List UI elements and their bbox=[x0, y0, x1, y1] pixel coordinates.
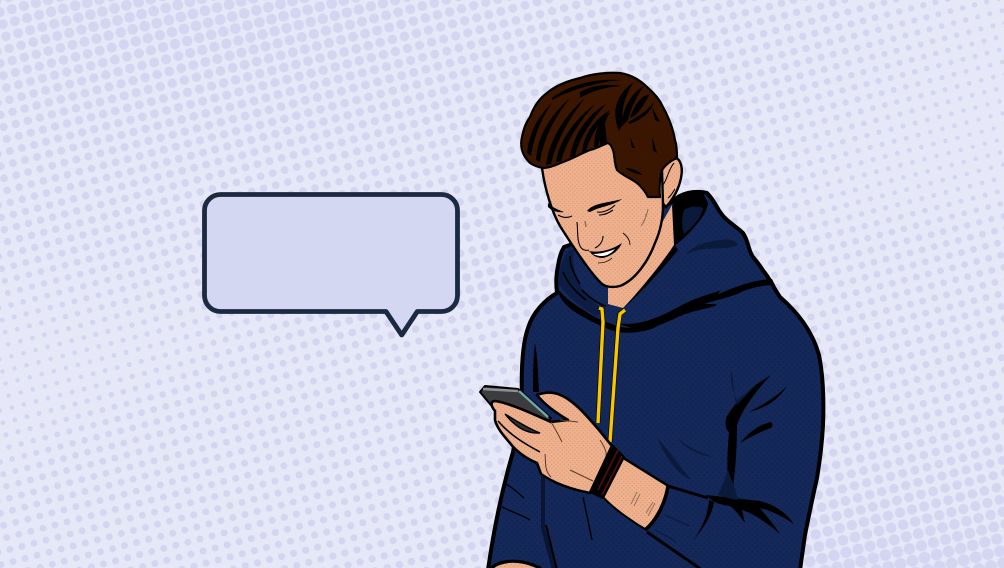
hair strands left bbox=[527, 98, 595, 165]
nose shade bbox=[585, 221, 586, 227]
arm wrinkle main bbox=[726, 375, 771, 503]
wristband detail bbox=[598, 450, 622, 495]
right drawstring bbox=[610, 310, 625, 442]
hair strands centre bbox=[570, 104, 610, 157]
right eye bbox=[597, 205, 615, 215]
sleeve shadow bbox=[718, 470, 738, 500]
arm wrinkle shadow bbox=[731, 370, 771, 405]
drawstring fill bbox=[610, 310, 625, 442]
chest wrinkles bbox=[657, 437, 691, 480]
drawstring outline bbox=[610, 310, 625, 442]
elbow crease bbox=[706, 495, 794, 534]
person looking at phone bbox=[480, 73, 823, 568]
head bbox=[521, 73, 682, 287]
mouth bbox=[588, 243, 622, 258]
hair top lines bbox=[552, 80, 622, 100]
collar shadow spikes bbox=[618, 290, 742, 328]
ear inner line bbox=[663, 163, 675, 198]
hood interior shade bbox=[682, 207, 703, 234]
sleeve edge top bbox=[623, 458, 708, 498]
forearm bbox=[590, 445, 668, 530]
arm wrinkle two bbox=[749, 386, 787, 412]
hoodie bbox=[488, 192, 823, 568]
left arm inner line bbox=[541, 472, 557, 568]
cheek hatch bbox=[641, 209, 648, 226]
chest wrinkle two bbox=[677, 438, 714, 457]
phone top edge bbox=[483, 389, 518, 391]
lower hand at bottom edge bbox=[490, 561, 541, 568]
left arm shadow bbox=[533, 343, 539, 392]
ear bbox=[660, 158, 682, 207]
speech bubble bbox=[204, 194, 458, 335]
face bbox=[542, 140, 663, 287]
right eyebrow bbox=[587, 199, 622, 212]
hand shape bbox=[492, 393, 612, 493]
wrist hatch bbox=[631, 492, 655, 516]
hair bbox=[521, 73, 677, 197]
cuff shadow lines bbox=[655, 515, 690, 542]
finger crease bbox=[498, 421, 540, 452]
phone bbox=[480, 386, 551, 436]
hood collar shadow line bbox=[556, 279, 775, 333]
left eye bbox=[558, 215, 572, 217]
phone body bbox=[480, 386, 551, 436]
phone between fingers bbox=[505, 414, 540, 433]
sleeve cuff edge bbox=[645, 486, 668, 530]
left arm black crease bbox=[546, 525, 557, 568]
arm wrinkle three bbox=[740, 422, 772, 443]
hood front edge bbox=[624, 244, 678, 308]
neck bbox=[608, 205, 674, 308]
left drawstring bbox=[598, 308, 603, 423]
left eyebrow bbox=[548, 203, 564, 212]
lip line bbox=[598, 233, 630, 263]
teeth bbox=[593, 249, 615, 256]
hair side flecks bbox=[625, 107, 660, 175]
hood left folds bbox=[563, 256, 606, 306]
lower arm wrinkles bbox=[502, 484, 592, 540]
wrist skin bbox=[603, 458, 668, 529]
hood interior bbox=[672, 193, 708, 247]
sleeve edge bottom bbox=[647, 532, 702, 568]
phone teal edge bbox=[519, 391, 548, 417]
hand bbox=[492, 393, 612, 493]
knuckle lines bbox=[545, 420, 606, 481]
hoodie silhouette bbox=[488, 192, 823, 568]
hood fold shadow bbox=[687, 239, 738, 254]
wristband bbox=[590, 445, 624, 498]
nose bbox=[577, 222, 603, 250]
sleeve crease bbox=[693, 500, 714, 541]
drawstring outline bbox=[598, 308, 603, 423]
hair mass bbox=[521, 73, 677, 197]
hood left shadow bbox=[559, 250, 606, 316]
drawstring fill bbox=[598, 308, 603, 423]
hair swirl strands bbox=[615, 82, 654, 131]
